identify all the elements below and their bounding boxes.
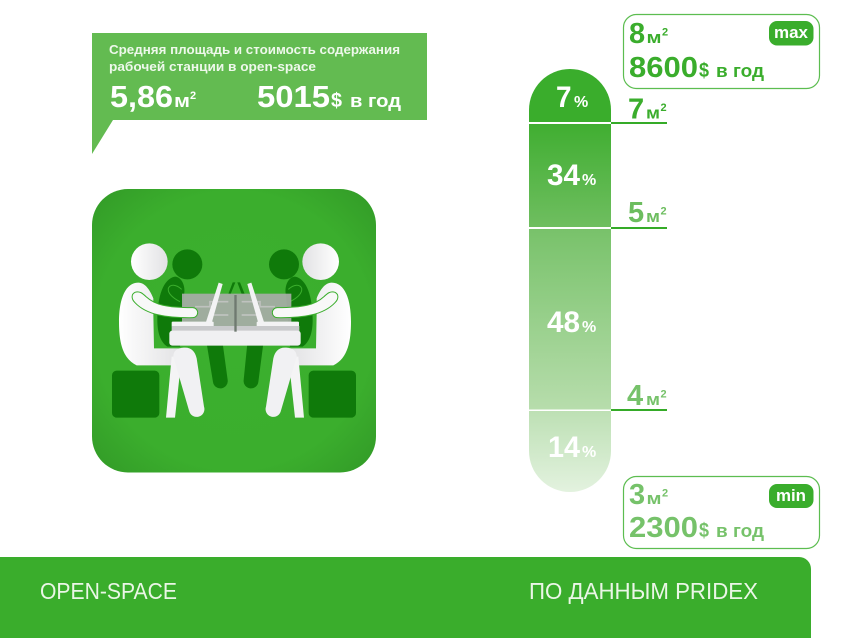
segment 48%: [529, 229, 611, 410]
marker: 4 m2: м: [646, 390, 660, 409]
back figure arm outlines: [168, 285, 302, 302]
marker: 4 m2: 2: [660, 388, 667, 400]
marker: 4 m2: 4: [627, 380, 643, 412]
box: maximum: [624, 14, 820, 88]
min area: 3: [629, 479, 645, 511]
min cost: 2300: [629, 512, 698, 544]
marker: 7 m2: [611, 94, 667, 126]
label 14%: 14: [548, 431, 580, 464]
laptops: [172, 283, 299, 327]
table: [169, 295, 301, 346]
callout value: area: 5,86: [110, 79, 173, 114]
marker: 7 m2: 2: [660, 102, 667, 114]
marker: 4 m2: [611, 380, 667, 412]
label 14%: %: [582, 444, 596, 461]
max cost: [629, 52, 765, 84]
min cost: $: [699, 520, 709, 542]
panel: open-space illustration: [92, 189, 376, 472]
callout value: cost: в год: [350, 91, 402, 111]
max cost: $: [699, 60, 709, 82]
min cost: в год: [716, 521, 765, 541]
marker: 5 m2: [611, 197, 667, 229]
front figure left: [119, 243, 204, 418]
footer title: OPEN-SPACE: [40, 578, 177, 604]
max area: 2: [662, 26, 668, 38]
callout value: area: 2: [190, 90, 196, 102]
box: minimum: [624, 476, 820, 548]
seats: [112, 371, 356, 418]
min badge: min: [776, 486, 806, 505]
illustration: people at a table: [112, 243, 356, 418]
label 48%: %: [582, 319, 596, 336]
min badge: [769, 484, 814, 508]
min area: [629, 479, 668, 511]
callout heading: Средняя площадь и стоимость содержания: [109, 42, 400, 57]
max cost: в год: [716, 61, 765, 81]
marker: 5 m2: 5: [628, 197, 644, 229]
segment 34%: [529, 124, 611, 227]
callout heading: рабочей станции в open-space: [109, 59, 316, 74]
label 7%: [556, 81, 588, 114]
label 34%: %: [582, 172, 596, 189]
label 14%: [548, 431, 596, 464]
footer bar: [0, 557, 811, 638]
max area: 8: [629, 18, 645, 50]
monitor reflections: [195, 302, 275, 315]
min area: м: [646, 489, 662, 508]
max cost: 8600: [629, 52, 698, 84]
marker: 7 m2: м: [646, 104, 660, 122]
footer source: ПО ДАННЫМ PRIDEX: [529, 578, 758, 604]
callout value: area: м: [174, 91, 190, 111]
label 7%: %: [574, 94, 588, 111]
max badge: [769, 21, 814, 46]
monitors: [182, 294, 291, 328]
callout value: cost: [257, 79, 402, 114]
max badge: max: [774, 23, 809, 42]
front figure right: [266, 243, 351, 418]
min cost: [629, 512, 765, 544]
segment 14%: [529, 411, 611, 492]
back figures: [157, 249, 313, 388]
marker: 5 m2: м: [646, 207, 660, 226]
label 34%: [547, 159, 596, 192]
callout value: cost: $: [331, 90, 342, 112]
callout heading: [109, 42, 400, 74]
segment 7%: [529, 69, 611, 122]
max area: [629, 18, 668, 50]
label 48%: [547, 306, 596, 339]
max area: м: [646, 28, 662, 47]
chart: percent distribution capsule: [529, 69, 611, 492]
callout: average area and cost: [92, 33, 427, 154]
min area: 2: [662, 488, 668, 500]
callout value: cost: 5015: [257, 79, 330, 114]
marker: 5 m2: 2: [660, 206, 667, 218]
marker: 7 m2: 7: [628, 94, 644, 126]
label 48%: 48: [547, 306, 580, 339]
label 34%: 34: [547, 159, 580, 192]
label 7%: 7: [556, 81, 572, 114]
